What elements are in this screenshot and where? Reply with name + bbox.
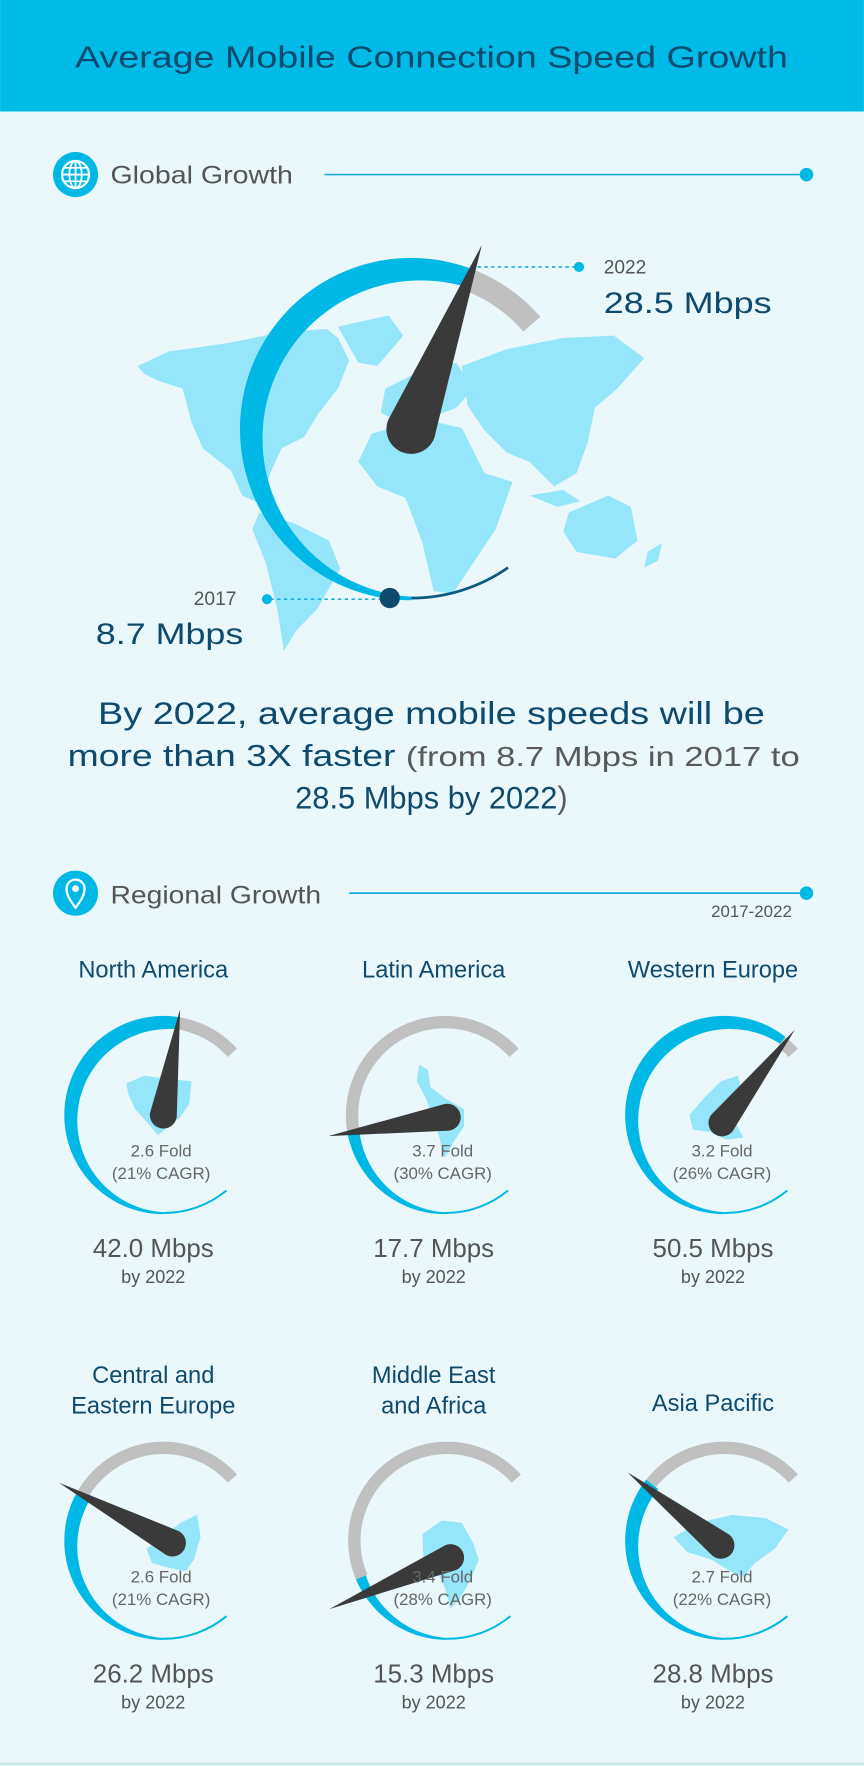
panel: Central and Eastern Europe: 2.6 Fold (131, 1567, 192, 1586)
panel: Central and Eastern Europe: Eastern Europe (71, 1393, 235, 1419)
panel: Latin America: 3.7 Fold (412, 1142, 473, 1161)
panel: North America (64, 960, 237, 1287)
callout 2017 (96, 588, 400, 651)
gray remaining arc (470, 270, 540, 332)
panel: Western Europe: 50.5 Mbps (653, 1235, 774, 1263)
header band (0, 0, 864, 112)
panel: Latin America: 17.7 Mbps (373, 1235, 494, 1263)
callout 2022: 28.5 Mbps (604, 287, 772, 320)
statement text: By 2022, average mobile speeds will be (98, 695, 765, 731)
world map (137, 315, 662, 651)
map: Africa (422, 1520, 479, 1608)
panel: Middle East and Africa: 15.3 Mbps (373, 1661, 494, 1689)
panel: Western Europe (625, 961, 798, 1287)
panel: Asia Pacific: 2.7 Fold (692, 1567, 753, 1586)
callout 2022: 2022 (604, 258, 646, 279)
panel: Western Europe: 3.2 Fold (692, 1142, 753, 1161)
title: Average Mobile Connection Speed Growth (75, 41, 788, 75)
callout 2017: 8.7 Mbps (96, 618, 243, 651)
section header: Regional Growth: 2017-2022 (711, 902, 792, 921)
panel: Central and Eastern Europe: (21% CAGR) (112, 1590, 210, 1609)
panel: North America: 2.6 Fold (131, 1142, 192, 1161)
tail arc (411, 568, 508, 598)
panel: Central and Eastern Europe: Central and (92, 1363, 214, 1389)
map: Latin America (417, 1064, 464, 1158)
panel: Middle East and Africa: by 2022 (402, 1693, 466, 1713)
panel: Western Europe: Western Europe (628, 958, 798, 984)
global gauge (240, 245, 540, 600)
statement text: 28.5 Mbps by 2022) (295, 780, 568, 816)
panel: Middle East and Africa: and Africa (381, 1393, 487, 1419)
panel: Western Europe: by 2022 (681, 1267, 745, 1287)
statement text: more than 3X faster (from 8.7 Mbps in 2017 to (68, 739, 800, 773)
panel: Asia Pacific (625, 1394, 798, 1712)
panel: Asia Pacific: 28.8 Mbps (653, 1661, 774, 1689)
panel: Latin America: (30% CAGR) (393, 1164, 492, 1183)
panel: Asia Pacific: (22% CAGR) (673, 1590, 771, 1609)
panel: Central and Eastern Europe (59, 1366, 237, 1712)
callout 2022 (478, 258, 772, 320)
panel: North America: (21% CAGR) (112, 1164, 210, 1183)
panel: North America: North America (78, 958, 229, 984)
icon: location pin (53, 871, 98, 916)
panel: Middle East and Africa: 3.4 Fold (412, 1567, 473, 1586)
panel: Middle East and Africa: (28% CAGR) (393, 1590, 492, 1609)
panel: Asia Pacific: by 2022 (681, 1693, 745, 1713)
panel: Latin America: Latin America (362, 958, 506, 984)
needle (379, 236, 505, 461)
panel: Latin America (328, 960, 518, 1287)
callout 2017: 2017 (194, 589, 236, 610)
panel: North America: 42.0 Mbps (93, 1235, 214, 1263)
section header: Global Growth (53, 152, 813, 197)
map: Asia (674, 1515, 788, 1577)
panel: Latin America: by 2022 (402, 1267, 466, 1287)
section header: Global Growth: Global Growth (110, 163, 293, 190)
blue progress arc (240, 258, 470, 600)
map: CEE (146, 1515, 201, 1571)
panel: Western Europe: (26% CAGR) (673, 1164, 771, 1183)
icon: globe (53, 152, 98, 197)
section header: Regional Growth (53, 871, 813, 921)
panel: Middle East and Africa: Middle East (372, 1363, 496, 1389)
section header: Regional Growth: Regional Growth (110, 882, 321, 909)
panel: Asia Pacific: Asia Pacific (652, 1391, 774, 1417)
panel: Central and Eastern Europe: by 2022 (121, 1693, 185, 1713)
map: North America (126, 1076, 192, 1135)
map: Western Europe (689, 1076, 743, 1140)
panel: Middle East and Africa (330, 1366, 521, 1712)
panel: Central and Eastern Europe: 26.2 Mbps (93, 1661, 214, 1689)
statement text (68, 695, 800, 816)
panel: North America: by 2022 (121, 1267, 185, 1287)
